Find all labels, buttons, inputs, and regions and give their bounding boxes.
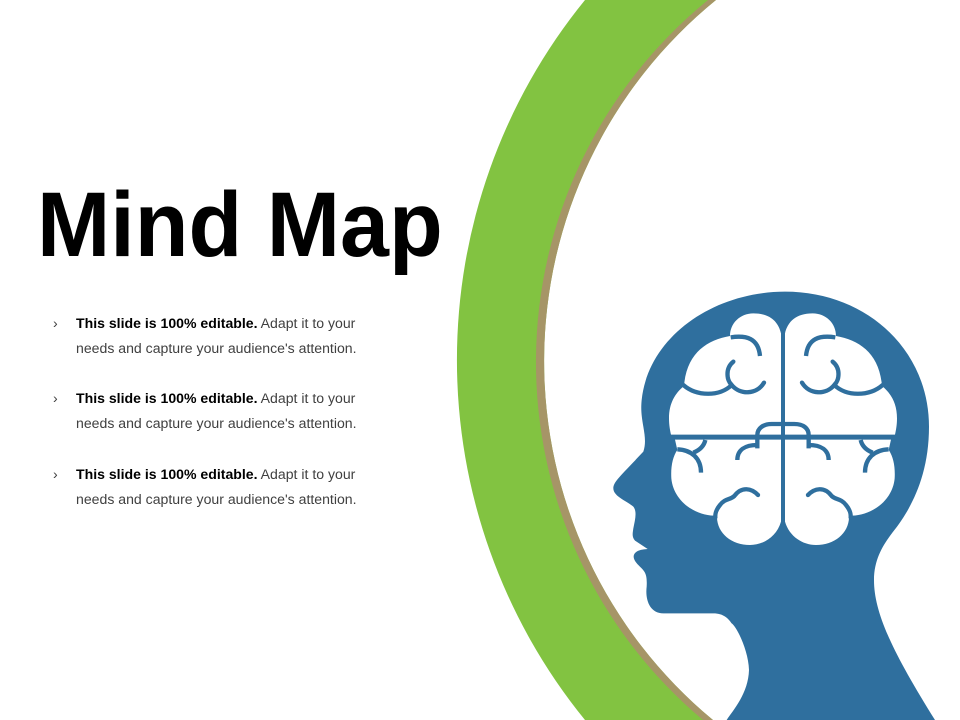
brain: left hemisphere: [669, 313, 781, 545]
bullet text 1: needs and capture your audience's attention.: [76, 340, 357, 356]
green ring arc: [457, 0, 716, 720]
bullet text 1: ›: [53, 315, 58, 331]
bullet text 3: ›: [53, 466, 58, 482]
lower right lobe: [785, 440, 895, 545]
brain: right hemisphere: [785, 313, 897, 545]
bullet text 3: [53, 466, 357, 507]
right brain folds: [802, 337, 889, 517]
tan inner ring edge: [536, 0, 716, 720]
bullet text 3: needs and capture your audience's attention.: [76, 491, 357, 507]
lower left lobe: [671, 440, 781, 545]
head silhouette: [613, 292, 935, 720]
icon: head with brain: [613, 292, 935, 720]
bullet text 2: This slide is 100% editable. Adapt it to your: [76, 390, 355, 406]
bullet text 2: ›: [53, 390, 58, 406]
bullet text 3: This slide is 100% editable. Adapt it to your: [76, 466, 355, 482]
upper right lobe: [785, 313, 897, 435]
brain centre arch: [757, 424, 809, 448]
left brain folds: [677, 337, 764, 517]
bullet text 2: [53, 390, 357, 431]
title: Mind Map: [37, 173, 443, 276]
bullet text 2: needs and capture your audience's attention.: [76, 415, 357, 431]
bullet text 1: This slide is 100% editable. Adapt it to your: [76, 315, 355, 331]
upper left lobe: [669, 313, 781, 435]
bullet text 1: [53, 315, 357, 356]
